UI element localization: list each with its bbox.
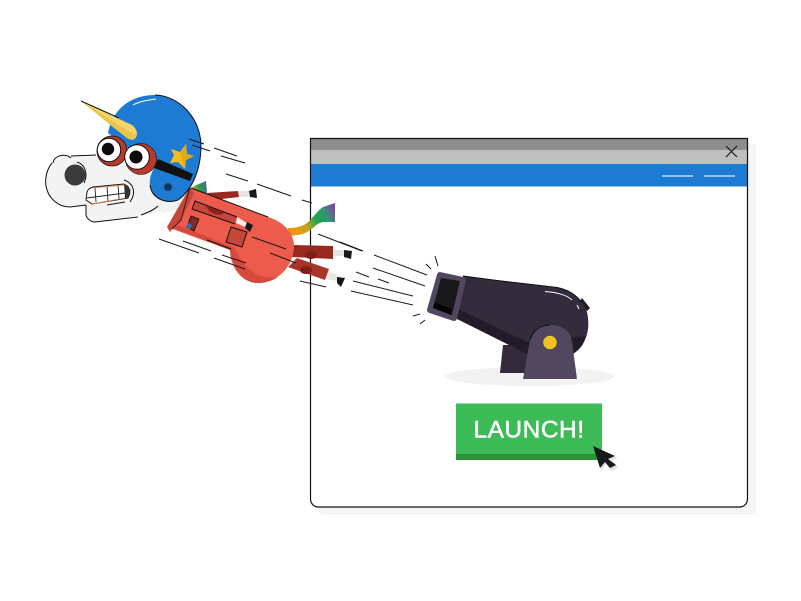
- toolbar dashes: [662, 175, 735, 177]
- goggle strap: [154, 159, 193, 181]
- panel: browser window: [310, 138, 756, 515]
- icon: cannon blast sparks: [413, 256, 438, 324]
- speed lines: [159, 139, 427, 305]
- button: launch: [456, 404, 602, 460]
- unicorn head: [45, 145, 190, 222]
- near back leg: [288, 258, 329, 280]
- unicorn horn: [81, 101, 137, 140]
- body: grille badge: [187, 216, 199, 231]
- icon: mouse cursor: [593, 446, 618, 471]
- cannon mouth: [430, 275, 463, 318]
- body: saddle patch: [226, 227, 247, 247]
- icon: close X: [726, 146, 737, 157]
- icon: cannon: [430, 275, 614, 386]
- star: [170, 144, 194, 169]
- unicorn helmet: [108, 95, 201, 201]
- teeth: [86, 180, 134, 205]
- near front leg: [192, 201, 237, 224]
- button label: LAUNCH!: [473, 416, 585, 444]
- unicorn far legs: [192, 181, 352, 259]
- unicorn tail: [288, 203, 335, 236]
- nostril: [64, 164, 86, 186]
- goggles: [97, 136, 156, 174]
- unicorn body: [167, 187, 345, 287]
- cannon bracket: [523, 325, 577, 379]
